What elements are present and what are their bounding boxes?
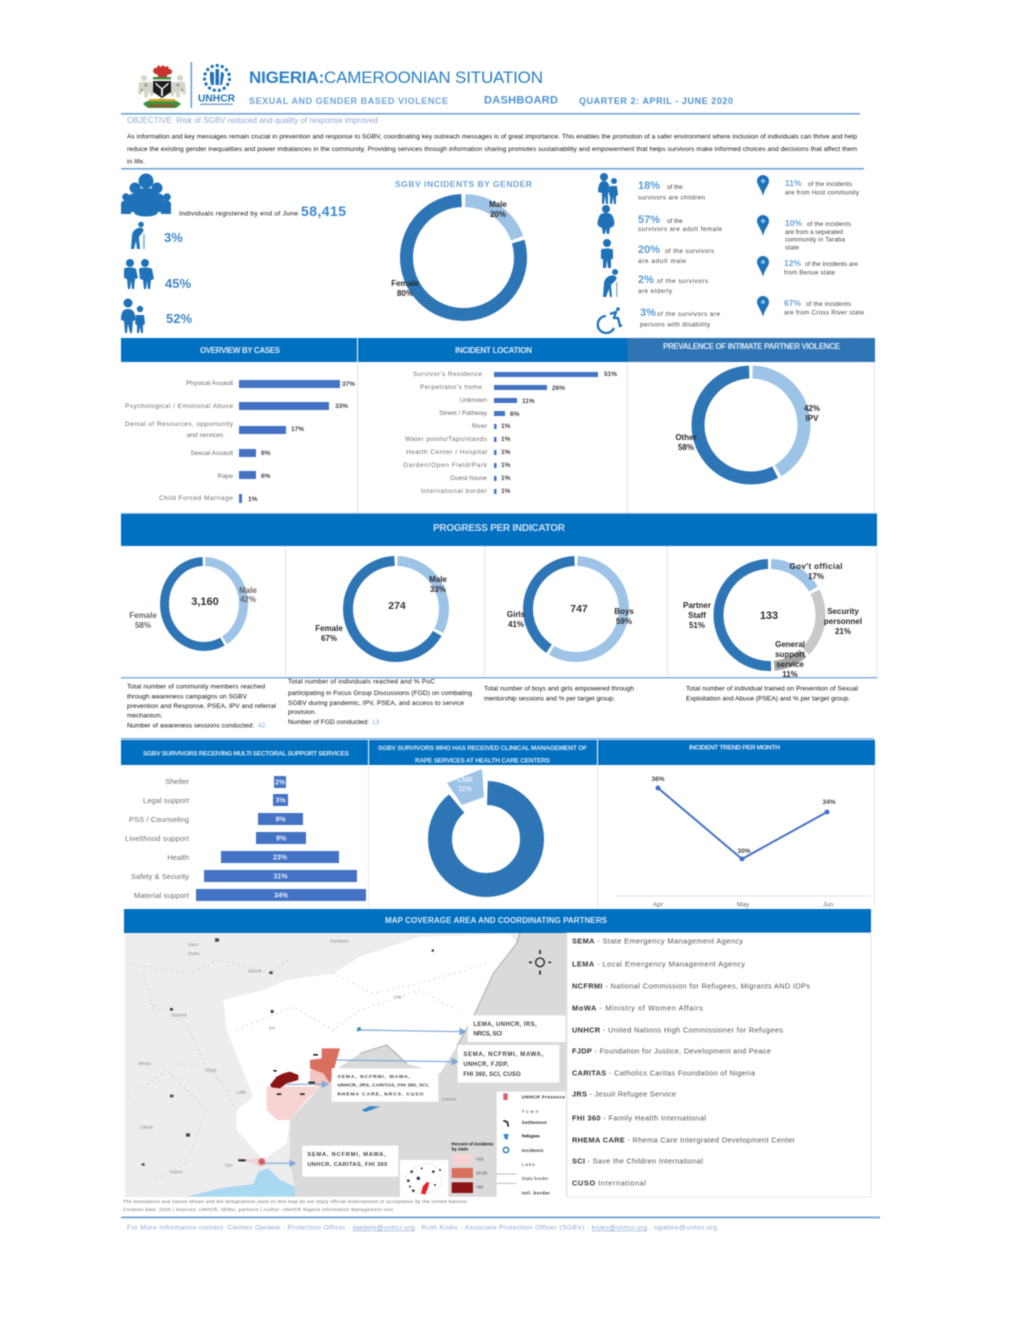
panel: incident locations summary: state [785,244,799,252]
chart: individuals trained on PSEA: Security [827,607,859,616]
exploded slice [447,769,484,805]
funnel bar chart: 9% [276,836,287,842]
line chart: May [737,902,750,908]
icon: adult male [601,239,613,268]
header [598,740,875,765]
funnel bar chart: 34% [274,892,289,900]
header: RAPE SERVICES AT HEALTH CARE CENTERS [415,758,551,764]
panel: prevalence of intimate partner violence: Other [675,433,697,442]
panel: coordinating partners list: JRS - Jesuit Refugee Service [572,1090,676,1098]
map: coverage area [125,933,570,1197]
legend: percent of incidents: Percent of incidents [452,1141,494,1146]
icon: wheelchair [598,307,622,333]
registered individuals: Individuals registered by end of June [179,210,298,218]
funnel bar chart: 9% [275,816,286,824]
header: OVERVIEW BY CASES [200,346,281,355]
text block: PSEA training: Total number of individual trained on Prevention of Sexual [686,686,859,692]
bar chart: 1% [501,475,511,482]
bar chart: 6% [510,411,520,418]
panel: survivor profile: persons with disability [640,322,711,328]
text block: boys and girls [484,686,634,702]
bar chart: 51% [604,371,617,378]
chart: focus group participants: 67% [321,634,337,643]
text block: focus group discussions: Number of FGD conducted: [288,719,369,726]
donut [440,793,532,885]
panel: survivor profile: survivors are children [638,194,705,202]
map disclaimer [123,1199,468,1212]
panel: survivor profile: of the survivors are [657,311,720,318]
heading: map coverage area: MAP COVERAGE AREA AND COORDINATING PARTNERS [385,916,608,925]
callout: northern partners: LEMA, UNHCR, IRS, [473,1022,537,1028]
legend: Intl. border [522,1190,550,1195]
chart: focus group participants: 33% [430,585,446,594]
bar chart: 33% [335,403,348,410]
panel: coordinating partners list: NCFRMI - National Commission for Refugees, Migrants AND IDPs [572,982,810,990]
chart: individuals trained on PSEA: Partner [683,601,711,610]
callout: Taraba partners: SEMA, NCFRMI, MAWA, [463,1052,544,1058]
line chart [615,776,870,908]
bar chart: 37% [342,381,355,388]
place labels: Kaduna [172,1013,187,1018]
text block: boys and girls: mentorship sessions and % per target group. [484,696,615,702]
text block: awareness campaigns: Number of awareness sessions conducted: [127,722,254,730]
funnel bar chart: 23% [273,854,288,862]
map disclaimer: Creation date: 2020 | Sources: UNHCR, SEMA, partners | Author: UNHCR Nigeria Information Management Unit [123,1207,394,1212]
legend: Incidents [522,1148,544,1153]
place labels: Garoua [442,1097,457,1102]
panel: incident locations summary [757,175,864,317]
text block: PSEA training [686,686,859,702]
elderly percent: 3% [164,230,183,245]
line chart: Jun [823,902,834,908]
bar chart: Psychological / Emotional Abuse [125,403,233,410]
header [121,338,357,362]
place labels: Lokoja [140,1124,153,1129]
panel: incident locations summary: of the incidents [807,221,851,228]
chart: individuals trained on PSEA: 51% [689,621,705,630]
legend: percent of incidents: >50 [476,1185,484,1190]
survivors disability: 3% [640,307,656,319]
bar chart: Rape [217,473,233,480]
survivors adult female: 57% [638,214,660,226]
chart: community members reached: Male [239,586,257,595]
text block: focus group discussions: 13 [372,719,380,726]
funnel bar chart [125,776,366,901]
panel: coordinating partners list: SCI - Save the Children International [572,1156,703,1166]
header [358,338,627,362]
labels: 42% [804,404,820,413]
heading: progress per indicator: PROGRESS PER INDICATOR [433,523,566,534]
panel: prevalence of intimate partner violence [627,338,875,478]
bar chart: Survivor's Residence [413,371,482,378]
header: INCIDENT TREND PER MONTH [689,744,780,752]
panel: incident locations summary: community in Taraba [785,236,845,244]
legend: percent of incidents [452,1141,494,1193]
bar chart: Water points/Taps/stands [405,436,488,443]
chart: boys and girls empowered [507,561,634,657]
place labels: Yola [393,994,402,999]
chart: boys and girls empowered: Boys [614,607,634,616]
bar chart: 11% [522,398,535,405]
panel: survivor profile: of the [667,218,683,225]
chart: individuals trained on PSEA: Staff [688,611,706,620]
panel: coordinating partners list: RHEMA CARE - Rhema Care Intergrated Development Center [572,1136,796,1144]
header: SGBV SURVIVORS WHO HAS RECEIVED CLINICAL MANAGEMENT OF [378,745,587,752]
funnel bar chart: Safety & Security [131,872,189,881]
legend: UNHCR Presence [522,1095,565,1100]
heading: map coverage area [124,909,871,933]
chart: focus group participants: Female [315,624,343,633]
bar chart: Sexual Assault [190,450,233,457]
legend: Town [522,1109,539,1114]
place labels: Dutse [188,951,200,956]
text block: focus group discussions: participating in Focus Group Discussions (FGD) on combating [288,690,472,697]
text block: PSEA training: Exploitation and Abuse (PSEA) and % per target group. [686,696,850,702]
chart: SGBV incidents by gender [391,179,532,314]
survivors elderly: 2% [638,274,654,286]
bar chart: 1% [501,462,511,469]
funnel bar chart: 31% [273,874,288,880]
panel: survivor profile: are elderly [638,288,673,295]
funnel bar chart: Shelter [165,777,190,786]
icon: children [598,173,618,204]
bar chart [125,380,355,503]
panel: incident locations summary: of the incidents are [805,261,858,268]
chart: boys and girls empowered: 747 [570,603,588,615]
legend: percent of incidents: by state [452,1146,469,1151]
header [121,740,368,765]
survivors adult male: 20% [638,244,660,256]
panel: incident locations summary: from Benue state [784,270,835,276]
impacted states [267,1087,320,1120]
chart: SGBV incidents by gender: Female [391,279,419,288]
icon: adult female [598,205,614,234]
chart: individuals trained on PSEA: 11% [782,670,798,679]
callout: Cross River partners: UNHCR, CARITAS, FHI 360 [307,1162,387,1168]
icon: UNHCR logo [198,66,236,105]
bar chart: Garden/Open Field/Park [403,462,488,469]
funnel bar chart: Material support [134,891,190,900]
chart: boys and girls empowered: Girls [507,610,526,619]
legend: percent of incidents: <10 [476,1157,484,1162]
chart: individuals trained on PSEA: service [776,660,804,669]
panel: coordinating partners list: FJDP - Foundation for Justice, Development and Peace [572,1046,771,1056]
icon: children [121,298,145,333]
icon: elderly [131,222,145,249]
text block: awareness campaigns: Total number of community members reached [127,684,265,690]
chart: individuals trained on PSEA: 17% [808,572,824,581]
panel: survivor profile: are adult male [638,258,686,265]
bar chart: 1% [501,488,511,495]
panel: clinical management of rape [369,740,597,885]
chart: boys and girls empowered: 59% [616,617,632,626]
bar chart: 1% [501,423,511,430]
place labels: Kano [188,942,199,947]
chart: individuals trained on PSEA: support [775,650,805,659]
bar chart: Health Center / Hospital [406,449,488,456]
text block: focus group discussions: SGBV during pandemic, IPV, PSEA, and access to service [288,700,464,707]
panel: incident locations summary: are from a separated [785,229,843,236]
panel: coordinating partners list: CUSO International [572,1178,646,1188]
slice label: CMR [457,777,473,784]
bar chart: Unknown [460,397,487,404]
icon: adults [124,259,154,289]
icon: pin 3 [757,256,769,277]
lake and rivers [362,1106,380,1112]
bar chart: 1% [501,436,511,443]
text block: boys and girls: Total number of boys and girls empowered through [484,686,634,692]
line chart: Apr [653,902,664,908]
panel: coordinating partners list: SEMA - State Emergency Management Agency [572,936,743,946]
divider [190,62,192,108]
place labels [138,939,457,1174]
panel: coordinating partners list: LEMA - Local Emergency Management Agency [572,960,745,968]
panel: coordinating partners list: CARITAS - Catholics Caritas Foundation of Nigeria [572,1068,756,1078]
quarter label: QUARTER 2: APRIL - JUNE 2020 [579,96,733,106]
bar chart: Denial of Resources, opportunity [125,421,234,428]
panel: incident trend per month [598,740,875,908]
text block: awareness campaigns: mechanism. [127,712,163,720]
header: logos and title [138,62,733,108]
chart: focus group participants: Male [429,575,447,584]
chart: community members reached [129,562,257,646]
chart: focus group participants: 274 [388,600,406,612]
donut [698,372,804,478]
bar chart: 1% [248,496,258,503]
bar chart: Child Forced Marriage [159,495,233,502]
panel: prevalence of intimate partner violence: 58% [678,443,694,452]
bar chart: River [472,423,488,430]
map base [125,933,570,1197]
map disclaimer: The boundaries and names shown and the designations used on this map do not imply official endorsement or acceptance by the United Nations. [123,1199,468,1204]
icon: pin 2 [757,215,769,236]
panel: incident locations summary: are from Host community [785,190,860,196]
text block: awareness campaigns: 42 [258,722,266,730]
icon: crowd [121,174,171,216]
panel: population figures [121,174,346,333]
callout: Cross River partners [302,1146,398,1177]
dashboard label: DASHBOARD [484,94,558,106]
icon: UNHCR logo: UNHCR [198,94,236,104]
callout: Taraba partners [458,1045,559,1083]
place labels: Minna [138,1061,151,1066]
header: SGBV SURVIVORS RECEIVING MULTI SECTORAL SUPPORT SERVICES [143,750,350,758]
arrows to partners [264,1029,465,1166]
panel: overview by cases [121,338,357,503]
bar chart: Guest house [450,475,487,482]
footer contacts: For More Information contact: Clemen Ojedele - Protection Officer - ojedele@unhcr.org . Ruth Kioko - Associate Protection Officer (SGBV) - kioko@unhcr.org . ngabire@unhcr.org [127,1224,717,1232]
chart: community members reached: Female [129,611,157,620]
line chart: 34% [822,799,836,806]
introduction paragraph: As information and key messages remain crucial in prevention and response to SGBV, coordinating key outreach messages is of great importance. This enables the promotion of a safer environment where inclusion of individuals can thrive and help [127,134,857,140]
chart: community members reached: 42% [240,595,256,604]
objective and introduction [127,116,858,166]
chart: SGBV incidents by gender: 80% [397,289,413,298]
panel: survivor profile [598,173,722,333]
total: 58,415 [301,203,346,219]
legend: percent of incidents: 10-20 [476,1171,488,1176]
chart: individuals trained on PSEA: 21% [835,627,851,636]
text block: awareness campaigns: prevention and Response, PSEA, IPV and referral [127,703,277,710]
header [627,338,875,362]
panel: coordinating partners list: UNHCR - United Nations High Commissioner for Refugees [572,1026,783,1034]
text block: focus group discussions [288,678,472,726]
chart: community members reached: 3,160 [191,596,219,608]
callout: northern partners [468,1015,566,1042]
callout: Benue partners: RHEMA CARE, NRCS, CUSO [337,1092,423,1098]
header: PREVALENCE OF INTIMATE PARTNER VIOLENCE [663,342,841,351]
bar chart: Street / Pathway [439,410,488,417]
funnel bar chart: 2% [275,780,286,786]
header [369,740,597,765]
place labels: Uyo [225,1163,233,1168]
funnel bar chart: Legal support [143,796,190,805]
bar chart: 1% [501,449,511,456]
panel: incident location [358,338,627,495]
legend: Lake [522,1162,535,1167]
chart: boys and girls empowered: 41% [508,620,524,629]
icon: elderly [603,269,618,297]
text block: awareness campaigns: through awareness campaigns on SGBV [127,694,248,700]
legend [497,1092,566,1197]
callout: Benue partners: SEMA, NCFRMI, MAWA, [337,1074,411,1080]
bar chart: 6% [261,450,271,457]
funnel bar chart: Health [167,853,189,862]
chart: SGBV incidents by gender: 20% [490,210,506,219]
text block: focus group discussions: provision. [288,709,316,716]
callout: Benue partners [332,1068,438,1102]
objective: OBJECTIVE: Risk of SGBV reduced and quality of response improved [127,116,378,125]
callout: northern partners: NRCS, SCI [473,1032,502,1038]
introduction paragraph: reduce the existing gender inequalities and power imbalances in the community. Providing services through information sharing promotes sustainability and empowerment that helps survivors make informed choices and decisions that affect them [127,146,858,153]
funnel bar chart: PSS / Counseling [129,815,189,824]
chart: individuals trained on PSEA [683,562,862,679]
place labels: Abuja [205,1068,217,1073]
chart: individuals trained on PSEA: Gov't official [790,562,842,571]
labels: Male [489,200,507,209]
place labels: Lafia [237,1089,247,1094]
header: INCIDENT LOCATION [455,346,532,355]
incidents host community: 11% [785,178,802,188]
place labels: Bauchi [248,969,262,974]
survivors children: 18% [638,180,660,192]
bar chart: Perpetrator's home [420,384,482,391]
bar chart: 26% [552,385,565,392]
adults percent: 45% [165,276,191,291]
panel: survivor profile: of the survivors [657,278,708,285]
text block: awareness campaigns [127,684,277,730]
title: NIGERIA:CAMEROONIAN SITUATION [249,68,543,87]
legend: State border [522,1176,549,1181]
callout: Taraba partners: UNHCR, FJDP, [463,1062,509,1068]
panel: incident locations summary: are from Cross River state [784,310,864,316]
panel: coordinating partners list: MoWA - Ministry of Women Affairs [572,1004,703,1012]
bar chart [403,371,617,495]
callout: Cross River partners: SEMA, NCFRMI, MAWA, [307,1152,386,1158]
place labels: Owerri [170,1169,183,1174]
callout: Taraba partners: FHI 360, SCI, CUSO [463,1072,521,1078]
line chart: 36% [651,776,665,783]
introduction paragraph: in life. [127,158,145,166]
chart title: SGBV INCIDENTS BY GENDER [395,179,532,189]
bar chart: International border [421,488,488,495]
place labels: Damaturu [330,939,350,944]
icon: pin 4 [757,296,769,317]
panel: coordinating partners list [567,933,871,1197]
legend: Refugees [522,1134,540,1139]
incidents Taraba: 10% [785,218,802,228]
bar chart: Physical Assault [186,380,233,387]
panel: incident locations summary: of the incidents [808,181,852,188]
chart: focus group participants [315,561,447,657]
panel: multi sectoral support services [121,740,368,901]
incidents Cross River: 67% [784,298,801,308]
place labels: Jos [268,1025,275,1030]
panel: survivor profile: of the survivors [665,248,714,255]
panel: prevalence of intimate partner violence: IPV [806,414,819,423]
icon: Nigerian coat of arms [138,65,186,108]
compass [529,950,551,975]
donut [406,200,520,314]
bar chart: and services [187,432,224,439]
bar chart: 6% [261,473,271,480]
panel: survivor profile: of the [667,184,683,191]
chart: individuals trained on PSEA: 133 [760,610,778,622]
chart: individuals trained on PSEA: General [775,640,805,649]
panel: incident locations summary: of the incidents [806,301,851,308]
panel: survivor profile: survivors are adult female [638,226,722,233]
line chart: 30% [737,848,751,855]
panel: coordinating partners list: FHI 360 - Family Health International [572,1114,706,1122]
chart: community members reached: 58% [135,621,151,630]
text block: focus group discussions: Total number of individuals reached and % PoC [288,678,435,686]
funnel bar chart: 3% [275,798,286,804]
legend: Settlement [522,1120,547,1125]
funnel bar chart: Livelihood support [125,834,190,843]
chart: individuals trained on PSEA: personnel [824,617,862,626]
inset map [400,1160,448,1197]
incidents Benue: 12% [784,258,801,268]
subtitle: SEXUAL AND GENDER BASED VIOLENCE [249,96,448,106]
icon: pin 1 [757,175,769,196]
heading: progress per indicator [121,514,877,546]
panel: clinical management of rape: 11% [458,786,473,793]
introduction paragraph [127,134,858,166]
bar chart: 17% [291,426,304,433]
children percent: 52% [166,311,192,326]
callout: Benue partners: UNHCR, JRS, CARITAS, FHI 360, SCI, [337,1082,430,1088]
